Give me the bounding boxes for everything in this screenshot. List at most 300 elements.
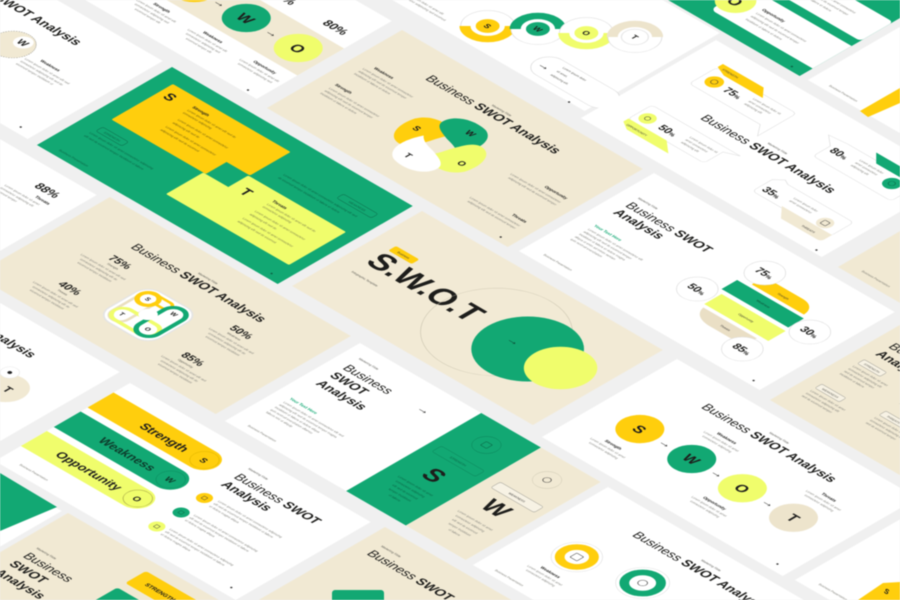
panel: strength: Lorem ipsum dolor sit amet elit sed do [186, 109, 237, 139]
item: lime icon: et dolore magna aliqua [159, 533, 192, 552]
outline circle [389, 270, 604, 394]
main title: S.W.O.T [358, 248, 494, 327]
card: weakness 80%: 80% [826, 146, 852, 162]
body text: aliqua ut enim ad minim veniam [573, 235, 617, 261]
text: strength [319, 83, 388, 123]
circle T [759, 498, 828, 538]
label strength [585, 434, 633, 461]
label threats [800, 486, 848, 514]
item: yellow icon: et dolore magna aliqua [208, 505, 240, 524]
title: Business SWOT Analysis [127, 241, 271, 324]
percentages [215, 0, 352, 37]
panel: green strength: STRENGTH [448, 456, 468, 467]
stat 40%: Threats [56, 289, 69, 296]
list: threats: sed do eiusmod tempor [864, 421, 898, 441]
green tile, bottom centre [332, 590, 384, 600]
panel: green strength: consectetur adipiscing [394, 480, 426, 498]
text: threats [464, 192, 529, 230]
body text [569, 224, 651, 271]
callout pill: Lorem ipsum dolor [561, 66, 588, 82]
ring W [500, 7, 576, 51]
left strength note [83, 126, 164, 173]
stat 40%: 40% [55, 280, 84, 297]
title [0, 547, 84, 600]
opportunity text [744, 8, 816, 49]
item: lime icon: Lorem ipsum dolor sit amet consectetur adipiscing [168, 528, 235, 567]
stat 75%: consectetur adipiscing elit do [79, 258, 119, 281]
card: strength 75% [678, 64, 803, 136]
arrow: → [758, 497, 780, 509]
card: strength 75%: adipiscing elit [743, 102, 763, 114]
weakness text: Lorem ipsum dolor sit amet [526, 565, 564, 586]
bubble 85% [713, 332, 772, 366]
slide: weakness bubble, top left [0, 0, 163, 139]
T bubble [0, 364, 45, 408]
bubble 30%: 30% [796, 325, 822, 340]
weakness bar: Weakness [755, 299, 772, 309]
text: weakness: Lorem ipsum dolor sit amet consectetur [361, 67, 415, 99]
title: Business [20, 550, 78, 584]
green circle [448, 303, 607, 395]
weakness text: Weakness [539, 566, 562, 579]
title: Business SWOT Analysis [698, 401, 841, 484]
bar: weakness: Weakness [95, 436, 159, 473]
title: SWOT [326, 370, 373, 397]
green ring icon [605, 561, 681, 600]
panel: threats: Lorem ipsum dolor sit amet consectetur [241, 217, 295, 248]
weakness text: Weakness [39, 59, 62, 72]
ring S: S [481, 23, 494, 30]
label opportunity [686, 492, 734, 520]
card: threats 35%: 35% [758, 185, 785, 201]
label threats: Threats [820, 492, 838, 503]
bubble 75%: 75% [751, 266, 777, 281]
weakness text [15, 53, 78, 90]
stat 40%: consectetur adipiscing elit do [31, 285, 71, 309]
labels: consectetur adipiscing sed [236, 62, 274, 84]
list: weakness: Lorem ipsum dolor sit amet [809, 389, 847, 411]
stat 50% [199, 318, 271, 360]
stat 85%: consectetur adipiscing elit do [159, 359, 199, 383]
bubble 50%: 50% [684, 282, 710, 297]
label opportunity: consectetur adipiscing [689, 500, 721, 518]
circles: → [261, 27, 283, 39]
list: weakness: WEAKNESS [821, 388, 840, 399]
item: yellow icon [192, 491, 283, 544]
ring S [450, 4, 526, 48]
card: threats 35% [743, 176, 856, 242]
slide: green with S and T panels: Business Presentation [58, 149, 90, 167]
bar: strength: S [197, 456, 211, 465]
slide: beige, right edge [838, 189, 900, 406]
list: strength: incididunt ut labore [838, 372, 866, 388]
ring O [548, 11, 624, 55]
stat 75%: Lorem ipsum dolor sit amet elit sed [79, 253, 127, 281]
bar: opportunity: Opportunity [52, 450, 126, 493]
slide: beige title, bottom centre [250, 527, 626, 600]
arrow: → [503, 335, 525, 347]
list: threats [864, 411, 900, 443]
label strength: Strength [603, 439, 624, 451]
small label: Marketing Slide [197, 272, 219, 285]
list: strength: consectetur adipiscing elit [847, 367, 883, 388]
ring O: O [579, 29, 593, 37]
bar: opportunity [21, 431, 163, 513]
lime circle [509, 338, 613, 398]
rounded SWOT app icon: O [142, 326, 152, 333]
circles: O [285, 42, 310, 56]
ring W: W [530, 25, 545, 34]
label opportunity: Opportunity [702, 496, 728, 511]
title: Marketing Slide [247, 467, 270, 481]
right weakness note: Lorem ipsum dolor sit amet consectetur adipiscing elit sed [282, 173, 359, 218]
list: strength: STRENGTH [862, 363, 882, 374]
title: Analysis [217, 479, 276, 513]
circle O [708, 468, 777, 508]
stat 50%: eiusmod tempor incididunt [204, 335, 241, 357]
arrow: → [413, 404, 435, 416]
item: yellow icon: elit sed do eiusmod tempor incididunt ut labore [212, 502, 275, 539]
stat 85%: eiusmod tempor incididunt [157, 363, 193, 384]
slide: strength weakness opportunity bars [0, 383, 371, 600]
panel: beige weakness: W [474, 496, 519, 522]
labels: consectetur adipiscing sed [184, 32, 222, 54]
pinwheel: O [454, 159, 469, 168]
bar: opportunity: O [130, 495, 144, 503]
item: green icon: et dolore magna aliqua [184, 519, 216, 538]
panel: threats: Threats [271, 199, 289, 210]
pinwheel [367, 103, 514, 187]
title [217, 467, 332, 534]
slide: rings, bottom right: Business Presentation [494, 569, 525, 587]
body text: laboris nisi ut aliquip [265, 411, 294, 428]
labels: Lorem ipsum dolor sit amet elit [186, 28, 228, 53]
title: Business SWOT Analysis [697, 112, 840, 195]
opportunity text: incididunt ut labore et dolore [744, 18, 784, 41]
yellow ring icon [540, 536, 613, 578]
text: opportunity: Lorem ipsum dolor sit amet consectetur [509, 173, 563, 204]
panel: beige weakness: Lorem ipsum dolor sit amet [456, 510, 494, 531]
left strength note: elit sed do eiusmod tempor incididunt ut labore [83, 134, 145, 171]
circle S: S [627, 423, 650, 436]
percentages: 80% [319, 18, 352, 37]
title: Marketing Slide [357, 357, 380, 371]
body text: adipiscing elit sed do eiusmod tempor [582, 230, 634, 260]
panel: green strength: elit sed do eiusmod [391, 484, 419, 500]
bubble 85%: 85% [729, 342, 755, 357]
label threats: Lorem ipsum dolor sit amet [804, 490, 842, 511]
panel: strength: Strength [191, 105, 211, 117]
item: green icon: elit sed do eiusmod tempor incididunt ut labore [188, 516, 250, 553]
body text: Lorem ipsum dolor sit amet consectetur elit sed [282, 401, 345, 437]
left strength note: STRENGTH [102, 131, 122, 143]
subtitle: Infographic Template [350, 270, 379, 287]
panel: threats: adipiscing elit sed do [248, 213, 278, 230]
title: Business SWOT [622, 200, 717, 255]
text: weakness: Weakness [373, 66, 396, 80]
text: threats: Lorem ipsum dolor sit amet consectetur [468, 196, 522, 227]
circles: W [231, 11, 259, 27]
body text: incididunt ut labore et dolore magna [578, 233, 627, 261]
W bubble: W [13, 38, 31, 49]
callout pill: → [534, 60, 556, 72]
strength shape: Strength [776, 292, 790, 301]
stat 85%: 85% [178, 351, 207, 368]
arrow: → [654, 437, 677, 450]
bar: weakness: W [162, 475, 178, 485]
slide: pinwheel flower on beige [267, 30, 643, 247]
bar: strength [88, 392, 230, 474]
slide: rings, bottom right [473, 487, 849, 600]
stat 40%: Lorem ipsum dolor sit amet elit sed [32, 281, 79, 308]
small label: Marketing Slide [700, 559, 722, 572]
text: weakness: adipiscing elit sed do eiusmod tempor [357, 70, 409, 100]
opportunity text: Lorem ipsum dolor sit amet consectetur [755, 12, 809, 43]
text: threats: adipiscing elit sed do eiusmod tempor [466, 200, 518, 230]
stat 85% [151, 346, 223, 387]
callout pill [523, 52, 627, 112]
slide: beige list, far right [770, 322, 900, 539]
text: strength: Lorem ipsum dolor sit amet consectetur [328, 87, 382, 118]
slide: ring chain, top centre [343, 0, 729, 117]
card: threats 35%: amet consectetur [788, 199, 814, 215]
list: weakness: sed do eiusmod tempor [800, 394, 834, 414]
circle W [657, 439, 726, 479]
panel: green strength: ut labore [387, 494, 402, 502]
panel: threats: consectetur adipiscing [261, 205, 293, 224]
title: Marketing Slide [637, 197, 659, 210]
body text [265, 397, 352, 447]
list: strength: Lorem ipsum dolor sit amet [851, 365, 889, 387]
body text: adipiscing elit sed do eiusmod tempor magna [278, 403, 338, 439]
label weakness [698, 427, 746, 455]
circle W: W [678, 452, 704, 467]
label weakness: consectetur adipiscing [701, 435, 733, 453]
pinwheel: W [462, 129, 479, 138]
text: strength: adipiscing elit sed do eiusmod tempor [323, 89, 375, 119]
slide: text, green S and beige W panels: Business Presentation [247, 424, 278, 442]
yellow arrow shape, top right [860, 88, 900, 117]
stat 85%: Lorem ipsum dolor sit amet elit sed [160, 355, 208, 382]
weakness text [522, 561, 570, 589]
badge: Business [396, 251, 411, 260]
weakness text: consectetur adipiscing elit sed do [19, 60, 64, 86]
slide: green opportunity panels, top right [559, 0, 900, 76]
rounded SWOT app icon [96, 285, 200, 345]
title: Analysis [312, 378, 371, 412]
slide: percentages with bars [519, 173, 895, 390]
list: strength: sed do eiusmod tempor [843, 370, 877, 390]
stat 88% [0, 172, 67, 214]
list: weakness [800, 384, 856, 416]
label strength: Lorem ipsum dolor sit amet [589, 437, 627, 459]
slide: top right corner: Business Presentation [828, 84, 859, 102]
text: weakness: incididunt ut labore et dolore [353, 72, 392, 95]
slide: S W O T circles with arrows [542, 359, 900, 576]
label weakness: Lorem ipsum dolor sit amet [702, 431, 740, 452]
stat 88%: Threats [34, 195, 52, 206]
title: Business SWOT [230, 471, 325, 526]
bubble 75% [735, 256, 794, 290]
panel: threats: Lorem ipsum dolor sit amet elit sed do [266, 203, 317, 233]
label strength: consectetur adipiscing [588, 441, 619, 460]
card: strength 75%: 75% [719, 86, 746, 101]
title: Marketing Slide [35, 547, 58, 560]
label opportunity: Lorem ipsum dolor sit amet [690, 496, 728, 517]
title: Business [339, 362, 397, 396]
slide: S W O process with percentages, top [16, 0, 392, 99]
title: Business SWOT Analysis [422, 73, 565, 156]
card: weakness 80%: adipiscing elit [849, 164, 870, 176]
rounded SWOT app icon: T [117, 312, 126, 317]
card: opportunity 50%: 50% [655, 123, 681, 139]
opportunity text: adipiscing elit sed do eiusmod tempor [749, 15, 801, 45]
arrow: → [706, 467, 729, 480]
body text: Your Text Here [593, 224, 624, 242]
rounded SWOT app icon: W [168, 311, 180, 318]
slide: text, green S and beige W panels [225, 343, 601, 560]
ring T: T [628, 34, 641, 41]
slide: green with S and T panels [37, 67, 413, 284]
text: opportunity: adipiscing elit sed do eiusmod tempor [507, 177, 559, 206]
card: weakness 80%: Lorem ipsum dolor [858, 159, 886, 175]
opportunity text: Opportunity [761, 8, 787, 23]
stat 85%: Opportunity [176, 358, 195, 369]
O circle [706, 0, 765, 18]
body text: incididunt ut labore et dolore aliqua [273, 406, 321, 434]
stat 50%: consectetur adipiscing elit do [207, 332, 247, 355]
panel: strength: Lorem ipsum dolor sit amet consectetur [164, 125, 218, 157]
stat 40%: eiusmod tempor incididunt [28, 289, 65, 310]
pinwheel: T [401, 152, 415, 160]
label threats: consectetur adipiscing [803, 494, 835, 512]
item: green icon [169, 505, 259, 558]
item: lime icon [145, 520, 235, 572]
slide: 88 percent, left [0, 56, 97, 273]
slide: percentages with bars: Business Presentation [542, 253, 573, 271]
panel: strength: adipiscing elit sed do [171, 121, 201, 139]
slide: beige title with strength panels, lower left [0, 513, 309, 600]
slide: analysis with T, left [0, 233, 120, 450]
card: opportunity 50%: adipiscing elit [680, 141, 700, 153]
callout pill: adipiscing elit. [549, 73, 570, 86]
W bubble [0, 26, 46, 64]
opportunity bar: Opportunity [737, 313, 755, 323]
bubble 30% [780, 315, 839, 349]
card: opportunity 50%: amet consectetur [684, 138, 710, 154]
slide: strength weakness opportunity bars: Business Presentation [18, 463, 49, 481]
title [312, 357, 407, 412]
badge [388, 246, 419, 264]
list: strength [838, 360, 899, 394]
small label: Marketing Slide [768, 432, 791, 445]
panel: green strength: S [414, 464, 453, 487]
text: opportunity [505, 169, 570, 206]
slide: beige, right edge: Business Presentation [860, 270, 892, 288]
panel: weakness [91, 588, 213, 600]
text: threats: Threats [510, 213, 529, 224]
body text: quis nostrud exercitation ullamco [269, 408, 314, 434]
item: green icon: Lorem ipsum dolor sit amet consectetur adipiscing [192, 514, 259, 553]
label weakness: Weakness [715, 432, 739, 445]
right weakness note: WEAKNESS [347, 201, 367, 212]
small label: Marketing Slide [766, 142, 789, 155]
text: strength: incididunt ut labore et dolore [319, 92, 358, 115]
slide: main cover S.W.O.T [292, 211, 663, 425]
stat 40% [23, 272, 95, 313]
body text: quis nostrud exercitation [569, 238, 604, 258]
labels [126, 0, 286, 88]
title: Analysis [610, 207, 669, 241]
panel: strength [125, 571, 241, 600]
right weakness note [277, 167, 378, 226]
text: weakness [353, 63, 422, 104]
body text: Lorem ipsum dolor sit amet consectetur elit [586, 228, 644, 261]
panel: green strength: Lorem ipsum dolor sit amet [397, 475, 434, 497]
circle O: O [729, 482, 753, 496]
panel: beige weakness: WEAKNESS [507, 492, 526, 503]
card: strength 75%: STRENGTH [721, 68, 740, 79]
bar: strength: Strength [136, 421, 192, 454]
card: weakness 80% [803, 130, 900, 201]
circle T: T [781, 512, 803, 525]
card: strength 75%: Lorem ipsum dolor sit [752, 97, 782, 115]
circle S [605, 409, 674, 449]
card: threats 35%: Lorem ipsum dolor [792, 197, 820, 213]
pinwheel: S [410, 124, 424, 133]
opportunity bar [704, 294, 786, 341]
stat 75%: 75% [105, 254, 134, 271]
panel: beige weakness [406, 448, 601, 560]
body text: Your Text Here [288, 397, 319, 415]
callout pill: sit amet, [555, 70, 569, 78]
weakness text: eiusmod tempor incididunt ut [15, 62, 55, 86]
ring T [597, 15, 673, 59]
slide: white with green block, lower left [0, 372, 62, 589]
panel: strength: adipiscing elit sed do eiusmod [159, 128, 201, 152]
title: SWOT [6, 558, 52, 585]
panel: beige weakness: tempor incididunt [447, 522, 472, 537]
panel: beige weakness: elit sed do eiusmod [451, 518, 479, 535]
yellow arrow with S: S [882, 588, 890, 597]
list: weakness: consectetur adipiscing elit [805, 392, 841, 413]
panel: threats: T [236, 186, 257, 198]
item: lime icon: elit sed do eiusmod tempor incididunt ut labore [164, 530, 226, 567]
stat 75% [71, 244, 143, 286]
threats shape: Threats [719, 324, 732, 332]
stat 50%: Weakness [226, 332, 242, 341]
panel: beige weakness: ut labore [447, 528, 462, 537]
stat 75%: Strength [106, 262, 120, 271]
panel: strength: S [159, 91, 181, 103]
panel: strength [114, 86, 288, 186]
small label: Marketing Slide [380, 545, 402, 558]
threats text [794, 0, 858, 21]
weakness text: consectetur adipiscing [525, 569, 556, 587]
panel: strength: consectetur adipiscing [182, 111, 213, 130]
slide: beige stats with icon [0, 197, 351, 414]
stat 88%: 88% [31, 181, 64, 200]
card: opportunity 50%: Lorem ipsum dolor sit [688, 136, 719, 154]
small label: Marketing Slide [490, 104, 513, 117]
strength shape [750, 276, 817, 314]
slide: yellow arrow, bottom right corner [795, 502, 900, 600]
stat 75%: eiusmod tempor incididunt [76, 261, 113, 283]
bubble 50% [668, 272, 727, 306]
panel: beige weakness: consectetur adipiscing [454, 514, 486, 533]
threats shape [690, 308, 757, 346]
card: weakness 80%: amet consectetur [854, 161, 880, 177]
